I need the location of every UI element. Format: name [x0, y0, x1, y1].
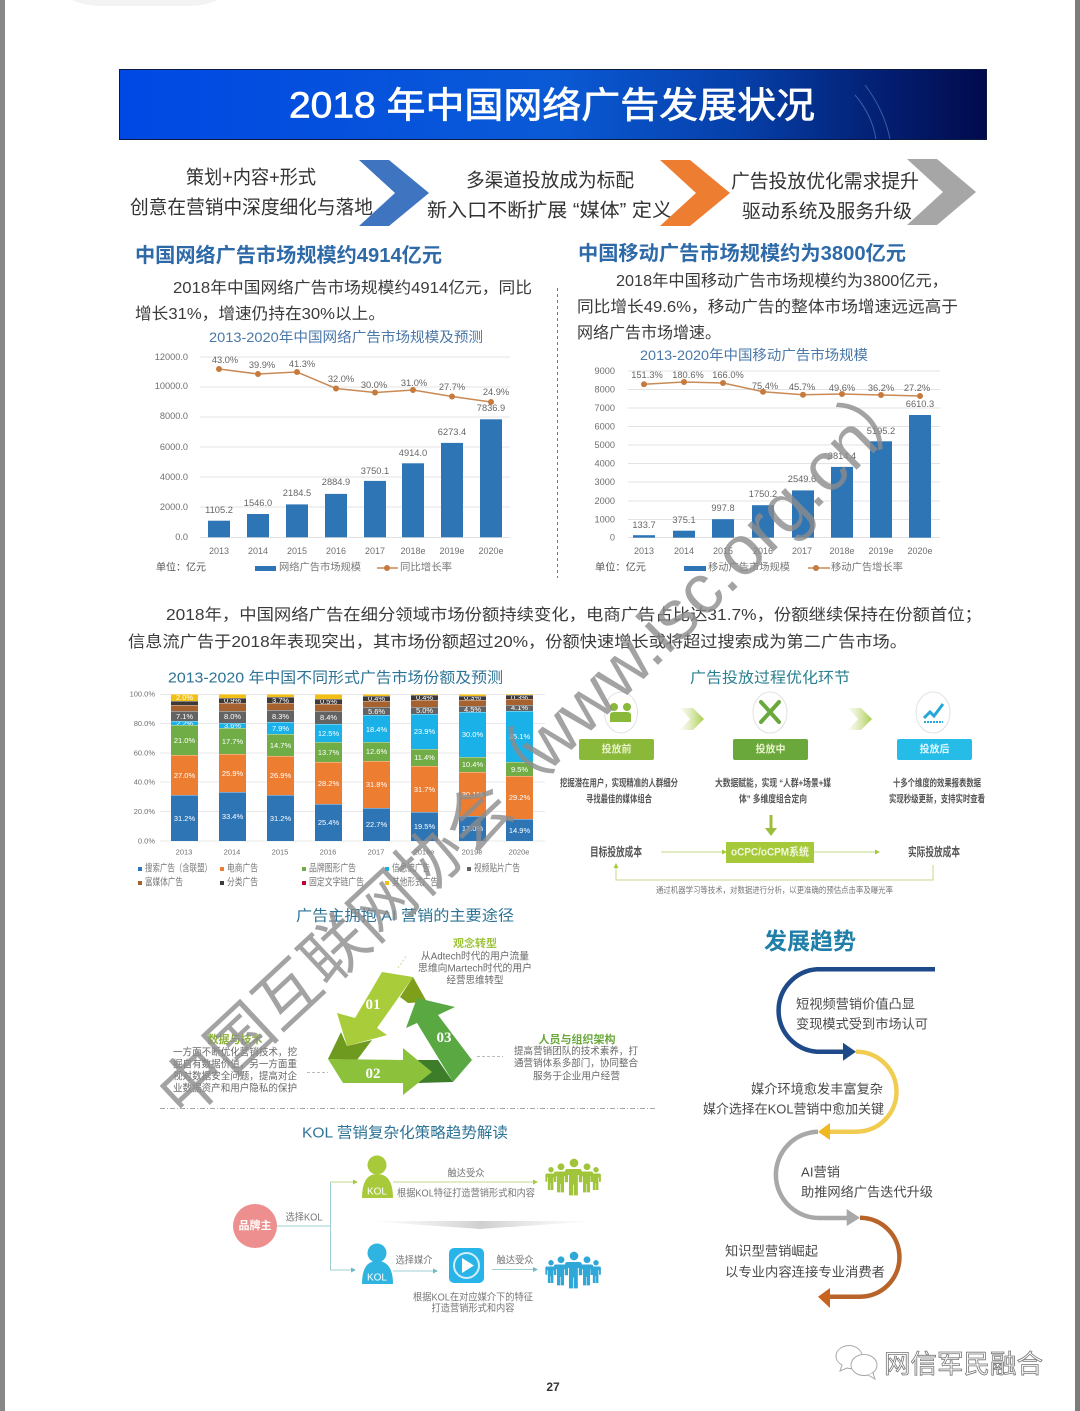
- chart frame: ad format share: [130, 670, 545, 888]
- stacked bars: ad format share: 8.4%: [320, 713, 337, 722]
- chart: network ad market size: 31.0%: [401, 378, 427, 388]
- chart: mobile ad market size: 8000: [595, 384, 615, 394]
- chart frame: ad format share: 60.0%: [134, 748, 155, 758]
- summary chevron row: 新入口不断扩展 “媒体” 定义: [427, 200, 672, 222]
- watermark: [144, 358, 932, 1132]
- diagram: development trends: AI营销: [801, 1164, 840, 1180]
- diagram: KOL marketing strategy: KOL: [367, 1272, 387, 1284]
- stacked bars: ad format share: 17.0%: [462, 824, 483, 833]
- chart frame: ad format share: 信息流广告: [392, 862, 430, 874]
- stacked bars: ad format share: 9.5%: [511, 765, 528, 774]
- diagram: ad delivery optimisation process: 挖掘潜在用户，实现精准的人群细分: [560, 776, 678, 790]
- chart: network ad market size: 0.0: [175, 532, 188, 542]
- chart: mobile ad market size: 1750.2: [749, 489, 777, 499]
- text: network ad summary: [135, 278, 532, 323]
- chart: network ad market size: 2017: [365, 546, 385, 556]
- text: mobile ad summary: [577, 272, 958, 342]
- chart: mobile ad market size: 2019e: [868, 546, 894, 556]
- chart: mobile ad market size: 180.6%: [672, 370, 704, 380]
- stacked bars: ad format share: 18.4%: [366, 725, 387, 734]
- diagram: advertiser AI marketing paths: 02: [366, 1066, 380, 1082]
- diagram: advertiser AI marketing paths: 掘自有数据价值，另一方面重: [173, 1058, 297, 1070]
- chart frame: ad format share: 品牌图形广告: [309, 862, 356, 874]
- stacked bars: ad format share: 28.2%: [318, 779, 339, 788]
- diagram: development trends: 变现模式受到市场认可: [796, 1016, 928, 1032]
- summary chevron row: 广告投放优化需求提升: [731, 170, 919, 192]
- diagram: advertiser AI marketing paths: 服务于企业用户经营: [533, 1070, 620, 1082]
- diagram: ad delivery optimisation process: 广告投放过程优化环节: [690, 670, 850, 686]
- chart: mobile ad market size: [595, 347, 940, 574]
- wechat account mark: [836, 1346, 1043, 1379]
- diagram: ad delivery optimisation process: 寻找最佳的媒体组合: [586, 792, 652, 806]
- stacked bars: ad format share: 19.5%: [414, 822, 435, 831]
- diagram: ad delivery optimisation process: 实际投放成本: [908, 844, 960, 859]
- stacked bars: ad format share: 30.0%: [462, 730, 483, 739]
- chart: mobile ad market size: 0: [610, 532, 615, 542]
- chart: mobile ad market size: 3814.4: [828, 451, 856, 461]
- chart frame: ad format share: 0.0%: [138, 836, 155, 846]
- diagram: advertiser AI marketing paths: 03: [436, 1030, 452, 1046]
- diagram: development trends: 助推网络广告迭代升级: [801, 1184, 933, 1200]
- chart: network ad market size: 7836.9: [477, 403, 505, 413]
- diagram: advertiser AI marketing paths: 观念转型: [453, 936, 497, 950]
- chart: mobile ad market size: 375.1: [672, 515, 696, 525]
- summary chevron row: 驱动系统及服务升级: [742, 200, 912, 222]
- stacked bars: ad format share: 12.6%: [366, 747, 387, 756]
- chart: network ad market size: 1546.0: [244, 498, 272, 508]
- chart frame: ad format share: 2015: [272, 848, 288, 856]
- chart: mobile ad market size: 9000: [595, 366, 615, 376]
- chart: network ad market size: 2013: [209, 546, 229, 556]
- diagram: KOL marketing strategy: 触达受众: [448, 1166, 484, 1180]
- stacked bars: ad format share: 17.7%: [222, 737, 243, 746]
- diagram: ad delivery optimisation process: 投放前: [602, 742, 632, 756]
- chart: network ad market size: 网络广告市场规模: [279, 560, 361, 574]
- stacked bars: ad format share: 10.4%: [462, 760, 483, 769]
- chart: mobile ad market size: 2020e: [907, 546, 933, 556]
- stacked bars: ad format share: 8.0%: [224, 712, 241, 721]
- chart frame: ad format share: 2014: [224, 848, 240, 856]
- title banner: [120, 70, 986, 140]
- diagram: advertiser AI marketing paths: 提高营销团队的技术素养，打: [514, 1044, 638, 1058]
- chart: mobile ad market size: 4000: [595, 458, 615, 468]
- diagram: advertiser AI marketing paths: 01: [366, 997, 380, 1013]
- chart: mobile ad market size: 5000: [595, 440, 615, 450]
- chart: mobile ad market size: 2549.6: [788, 474, 816, 484]
- chart: mobile ad market size: 移动广告市场规模: [708, 560, 790, 574]
- text: segment share paragraph: 信息流广告于2018年表现突出，其市场份额超过20%，份额快速增长或将超过搜索成为第二广告市场。: [128, 633, 907, 651]
- diagram: KOL marketing strategy: 选择媒介: [396, 1254, 432, 1266]
- chart: mobile ad market size: 133.7: [632, 520, 656, 530]
- chart: network ad market size: 12000.0: [155, 352, 188, 362]
- stacked bars: ad format share: [171, 694, 533, 841]
- chart: network ad market size: 同比增长率: [400, 560, 452, 574]
- summary chevron row: 策划+内容+形式: [186, 166, 316, 188]
- stacked bars: ad format share: 35.1%: [509, 732, 530, 741]
- chart: mobile ad market size: 75.4%: [752, 381, 778, 391]
- chart: network ad market size: 单位：亿元: [156, 560, 206, 574]
- diagram: development trends: 媒介环境愈发丰富复杂: [751, 1082, 883, 1096]
- chart: network ad market size: 2000.0: [160, 502, 188, 512]
- stacked bars: ad format share: 31.7%: [414, 785, 435, 794]
- diagram: advertiser AI marketing paths: 通营销体系多部门，协同整合: [514, 1056, 638, 1070]
- diagram: KOL marketing strategy: 根据KOL特征打造营销形式和内容: [397, 1186, 535, 1200]
- diagram: KOL marketing strategy: 根据KOL在对应媒介下的特征: [413, 1290, 533, 1304]
- chart: mobile ad market size: 6000: [595, 422, 615, 432]
- chart: network ad market size: 2016: [326, 546, 346, 556]
- watermark: ）: [830, 358, 932, 460]
- chart: network ad market size: 2020e: [478, 546, 504, 556]
- chart frame: ad format share: 40.0%: [134, 778, 155, 786]
- chart: network ad market size: 2019e: [439, 546, 465, 556]
- diagram: KOL marketing strategy: 打造营销形式和内容: [432, 1302, 514, 1314]
- diagram: advertiser AI marketing paths: 广告主拥抱 AI 营销的主要途径: [296, 908, 514, 924]
- diagram: KOL marketing strategy: 触达受众: [496, 1254, 534, 1266]
- chart: network ad market size: 6000.0: [160, 442, 188, 452]
- stacked bars: ad format share: 31.8%: [366, 780, 387, 789]
- chart: mobile ad market size: 27.2%: [904, 383, 930, 393]
- diagram: ad delivery optimisation process: 投放中: [756, 742, 786, 756]
- stacked bars: ad format share: 14.7%: [270, 741, 291, 750]
- chart: network ad market size: 4000.0: [160, 472, 188, 482]
- stacked bars: ad format share: 26.9%: [270, 771, 291, 780]
- diagram: advertiser AI marketing paths: [160, 908, 655, 1108]
- chart: network ad market size: 8000.0: [160, 411, 188, 421]
- stacked bars: ad format share: 8.3%: [272, 712, 289, 721]
- stacked bars: ad format share: 29.2%: [509, 793, 530, 802]
- diagram: ad delivery optimisation process: 实现秒级更新，支持实时查看: [889, 792, 985, 806]
- chart: mobile ad market size: 45.7%: [789, 382, 815, 392]
- chart frame: ad format share: 电商广告: [227, 862, 258, 874]
- stacked bars: ad format share: 33.4%: [222, 812, 243, 821]
- chart: network ad market size: 32.0%: [328, 374, 354, 384]
- chart: mobile ad market size: 2018e: [829, 546, 855, 556]
- text: network ad summary: 增长31%，增速仍持在30%以上。: [135, 305, 385, 323]
- chart: network ad market size: 1105.2: [205, 505, 233, 515]
- chart frame: ad format share: 2020e: [509, 848, 529, 856]
- chart: network ad market size: 2018e: [400, 546, 426, 556]
- chart: network ad market size: 24.9%: [483, 387, 509, 397]
- diagram: advertiser AI marketing paths: 从Adtech时代的用户流量: [421, 950, 529, 962]
- summary chevron row: 创意在营销中深度细化与落地: [130, 196, 373, 218]
- chart frame: ad format share: 2016: [320, 848, 336, 856]
- chart: mobile ad market size: 1000: [595, 514, 615, 524]
- summary chevron row: [130, 159, 976, 226]
- heading: mobile ad market: 中国移动广告市场规模约为3800亿元: [578, 241, 906, 265]
- chart: mobile ad market size: 2015: [713, 546, 733, 556]
- chart: mobile ad market size: 2014: [674, 546, 694, 556]
- title banner: 2018 年中国网络广告发展状况: [289, 84, 815, 126]
- diagram: development trends: 短视频营销价值凸显: [796, 996, 915, 1012]
- diagram: development trends: 发展趋势: [764, 928, 856, 954]
- diagram: development trends: [703, 928, 935, 1308]
- diagram: advertiser AI marketing paths: 思维向Martech时代的用户: [418, 962, 532, 974]
- diagram: advertiser AI marketing paths: 一方面不断优化营销技术，挖: [173, 1046, 297, 1058]
- chart: mobile ad market size: 7000: [595, 403, 615, 413]
- chart: network ad market size: 2015: [287, 546, 307, 556]
- stacked bars: ad format share: 13.7%: [318, 748, 339, 757]
- chart frame: ad format share: 富媒体广告: [145, 876, 183, 888]
- chart: network ad market size: 41.3%: [289, 359, 315, 369]
- stacked bars: ad format share: 27.0%: [174, 771, 195, 780]
- diagram: ad delivery optimisation process: oCPC/oCPM系统: [731, 844, 809, 858]
- chart: network ad market size: [155, 329, 510, 574]
- chart: mobile ad market size: 2016: [753, 546, 773, 556]
- chart frame: ad format share: 搜索广告（含联盟）: [145, 862, 212, 874]
- diagram: advertiser AI marketing paths: 数据与技术: [208, 1032, 262, 1046]
- summary chevron row: 多渠道投放成为标配: [466, 170, 634, 192]
- stacked bars: ad format share: 31.2%: [174, 814, 195, 823]
- diagram: KOL marketing strategy: 品牌主: [238, 1218, 272, 1232]
- watermark: 中国互联网协会: [144, 768, 527, 1132]
- stacked bars: ad format share: 31.2%: [270, 814, 291, 823]
- diagram: advertiser AI marketing paths: 经营思维转型: [446, 974, 504, 986]
- chart: network ad market size: 2014: [248, 546, 268, 556]
- chart frame: ad format share: 80.0%: [134, 719, 155, 728]
- chart frame: ad format share: 2018e: [414, 848, 434, 856]
- chart: mobile ad market size: 151.3%: [631, 370, 663, 380]
- stacked bars: ad format share: 11.4%: [414, 753, 435, 762]
- text: mobile ad summary: 同比增长49.6%，移动广告的整体市场增速远远高于: [577, 298, 958, 316]
- chart frame: ad format share: 2013-2020 年中国不同形式广告市场份额及预测: [168, 670, 503, 686]
- chart frame: ad format share: 2019e: [462, 848, 482, 856]
- watermark: www.isc.org.cn: [503, 401, 891, 784]
- chart: mobile ad market size: 2013-2020年中国移动广告市场规模: [640, 347, 868, 363]
- chart: mobile ad market size: 6610.3: [906, 399, 934, 409]
- chart frame: ad format share: 固定文字链广告: [309, 876, 364, 888]
- diagram: ad delivery optimisation process: 目标投放成本: [590, 844, 642, 859]
- stacked bars: ad format share: 25.4%: [318, 818, 339, 827]
- stacked bars: ad format share: 21.0%: [174, 736, 195, 745]
- diagram: advertiser AI marketing paths: 业数据资产和用户隐私的保护: [173, 1082, 297, 1094]
- chart: mobile ad market size: 997.8: [711, 503, 735, 513]
- stacked bars: ad format share: 12.5%: [318, 729, 339, 738]
- diagram: development trends: 媒介选择在KOL营销中愈加关键: [703, 1102, 884, 1116]
- chart: mobile ad market size: 单位：亿元: [595, 560, 646, 574]
- diagram: KOL marketing strategy: KOL 营销复杂化策略趋势解读: [302, 1124, 508, 1142]
- diagram: ad delivery optimisation process: 通过机器学习等技术，对数据进行分析，以更准确的预估点击率及曝光率: [656, 885, 893, 895]
- chart: mobile ad market size: 36.2%: [868, 383, 894, 393]
- chart: network ad market size: 30.0%: [361, 380, 387, 390]
- diagram: ad delivery optimisation process: 投放后: [920, 742, 950, 756]
- text: mobile ad summary: 2018年中国移动广告市场规模约为3800亿元，: [616, 272, 948, 290]
- chart: network ad market size: 3750.1: [361, 466, 389, 476]
- chart frame: ad format share: 分类广告: [227, 876, 258, 888]
- chart frame: ad format share: 2013: [176, 848, 192, 856]
- chart: network ad market size: 2013-2020年中国网络广告市场规模及预测: [209, 329, 483, 345]
- stacked bars: ad format share: 22.7%: [366, 820, 387, 829]
- diagram: ad delivery optimisation process: 大数据赋能，实现 “人群+场景+媒: [715, 776, 831, 790]
- chart frame: ad format share: 2017: [368, 848, 384, 856]
- chart: network ad market size: 2884.9: [322, 477, 350, 487]
- chart: mobile ad market size: 2017: [792, 546, 812, 556]
- diagram: KOL marketing strategy: [233, 1124, 601, 1314]
- chart: network ad market size: 27.7%: [439, 382, 465, 392]
- chart: mobile ad market size: 49.6%: [829, 383, 855, 393]
- text: segment share paragraph: [128, 605, 982, 651]
- diagram: ad delivery optimisation process: [560, 670, 985, 895]
- diagram: development trends: 以专业内容连接专业消费者: [725, 1264, 885, 1280]
- stacked bars: ad format share: 7.1%: [176, 712, 193, 721]
- chart: network ad market size: 39.9%: [249, 360, 275, 370]
- chart frame: ad format share: 100.0%: [130, 690, 155, 698]
- chart: network ad market size: 4914.0: [399, 448, 427, 458]
- chart: network ad market size: 43.0%: [212, 355, 238, 365]
- chart: network ad market size: 10000.0: [155, 381, 188, 391]
- diagram: ad delivery optimisation process: 十多个维度的效果报表数据: [893, 776, 981, 790]
- diagram: ad delivery optimisation process: 体” 多维度组合定向: [739, 792, 807, 806]
- text: network ad summary: 2018年中国网络广告市场规模约4914亿元，同比: [173, 278, 532, 297]
- chart frame: ad format share: 20.0%: [134, 807, 155, 816]
- chart frame: ad format share: 其他形式广告: [392, 876, 438, 888]
- stacked bars: ad format share: 14.9%: [509, 826, 530, 835]
- stacked bars: ad format share: 25.9%: [222, 769, 243, 778]
- chart: mobile ad market size: 2000: [595, 496, 615, 506]
- chart: network ad market size: 2184.5: [283, 488, 311, 498]
- stacked bars: ad format share: 7.9%: [272, 724, 289, 733]
- diagram: KOL marketing strategy: KOL: [367, 1186, 387, 1198]
- heading: network ad market: 中国网络广告市场规模约4914亿元: [135, 243, 442, 267]
- chart: mobile ad market size: 166.0%: [712, 370, 744, 380]
- chart: mobile ad market size: 5195.2: [867, 426, 895, 436]
- diagram: advertiser AI marketing paths: 视对数据安全问题，提高对企: [173, 1070, 297, 1082]
- stacked bars: ad format share: 23.9%: [414, 727, 435, 736]
- stacked bars: ad format share: 30.1%: [462, 790, 483, 799]
- chart: network ad market size: 6273.4: [438, 427, 466, 437]
- diagram: development trends: 知识型营销崛起: [725, 1244, 818, 1258]
- watermark: （: [463, 720, 565, 822]
- wechat account mark: 网信军民融合: [884, 1349, 1043, 1379]
- chart frame: ad format share: 视频贴片广告: [474, 862, 520, 874]
- chart: mobile ad market size: 2013: [634, 546, 654, 556]
- chart: mobile ad market size: 3000: [595, 477, 615, 487]
- text: segment share paragraph: 2018年，中国网络广告在细分领域市场份额持续变化，电商广告占比达31.7%，份额继续保持在份额首位；: [166, 605, 982, 624]
- diagram: advertiser AI marketing paths: 人员与组织架构: [538, 1032, 616, 1046]
- page number: 27: [546, 1380, 560, 1394]
- diagram: KOL marketing strategy: 选择KOL: [286, 1210, 323, 1224]
- text: mobile ad summary: 网络广告市场增速。: [577, 323, 721, 342]
- chart: mobile ad market size: 移动广告增长率: [831, 560, 903, 574]
